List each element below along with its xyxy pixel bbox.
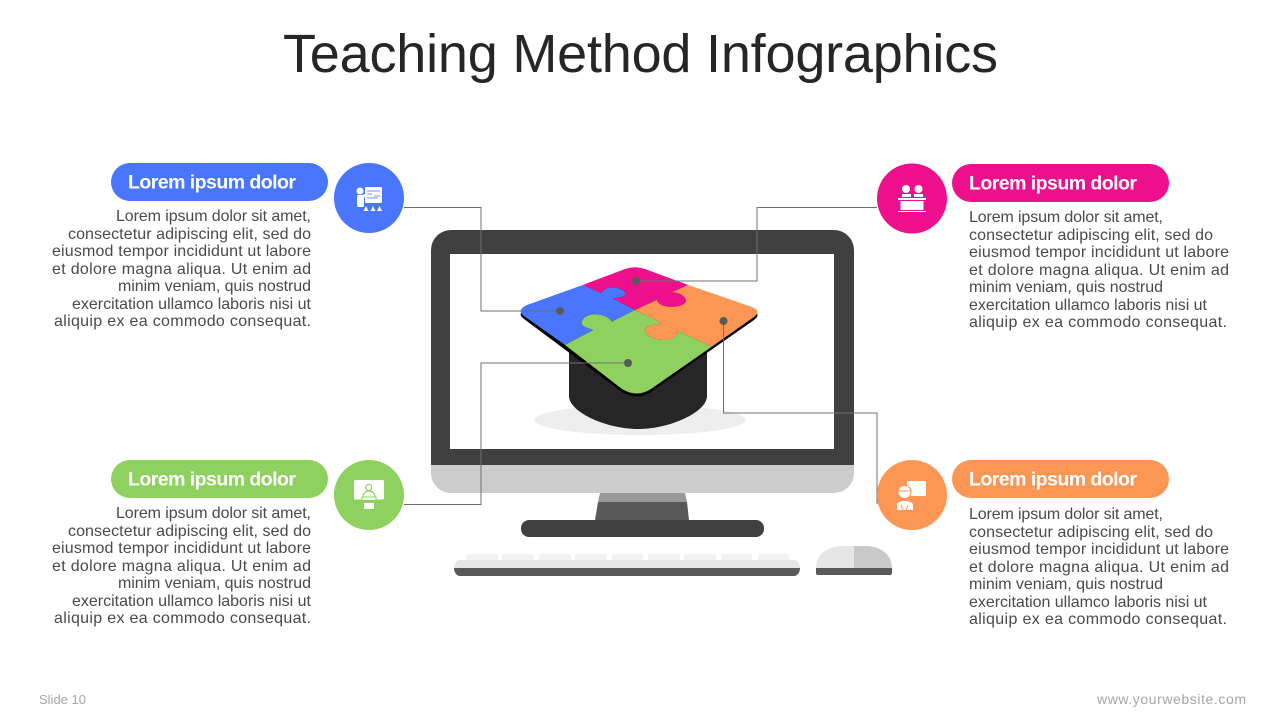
cap shadow: [534, 405, 746, 435]
body text: consectetur adipiscing elit, sed do: [969, 227, 1213, 244]
body text: exercitation ullamco laboris nisi ut: [72, 296, 312, 313]
body text: [52, 505, 312, 627]
body text: [52, 208, 312, 330]
puzzle piece: orange: [635, 285, 758, 347]
body text: Lorem ipsum dolor sit amet,: [116, 505, 311, 522]
body text: aliquip ex ea commodo consequat.: [54, 313, 311, 330]
heading pill: [111, 163, 328, 201]
body text: et dolore magna aliqua. Ut enim ad: [969, 559, 1229, 576]
keyboard: [454, 554, 800, 576]
icon: teacher with board: [877, 460, 947, 530]
panel: bottom right: [877, 460, 1229, 628]
panel: bottom left: [52, 460, 404, 627]
footer: slide number: Slide 10: [39, 692, 86, 707]
panel: top left: [52, 163, 404, 330]
monitor: [431, 230, 854, 493]
puzzle piece: blue: [521, 285, 635, 345]
body text: aliquip ex ea commodo consequat.: [54, 610, 311, 627]
body text: consectetur adipiscing elit, sed do: [68, 523, 311, 540]
body text: eiusmod tempor incididunt ut labore: [52, 243, 311, 260]
body text: [969, 506, 1229, 628]
body text: [969, 209, 1229, 331]
heading pill: Lorem ipsum dolor: [969, 172, 1137, 194]
panel: top right: [877, 164, 1229, 331]
connector: orange: [720, 317, 877, 504]
body text: aliquip ex ea commodo consequat.: [969, 314, 1227, 331]
body text: eiusmod tempor incididunt ut labore: [969, 541, 1229, 558]
body text: minim veniam, quis nostrud: [118, 278, 311, 295]
body text: Lorem ipsum dolor sit amet,: [969, 209, 1163, 226]
body text: exercitation ullamco laboris nisi ut: [72, 593, 312, 610]
connector: green: [404, 359, 632, 504]
heading pill: [111, 460, 328, 498]
heading pill: Lorem ipsum dolor: [969, 468, 1137, 490]
footer: website: www.yourwebsite.com: [1096, 691, 1246, 707]
graduation cap puzzle: [521, 267, 758, 435]
heading pill: Lorem ipsum dolor: [128, 468, 296, 490]
connector: blue: [404, 208, 564, 315]
body text: minim veniam, quis nostrud: [969, 576, 1163, 593]
body text: et dolore magna aliqua. Ut enim ad: [969, 262, 1229, 279]
icon: speaker at podium: [334, 460, 404, 530]
body text: consectetur adipiscing elit, sed do: [68, 226, 311, 243]
board edge: [521, 270, 758, 396]
body text: eiusmod tempor incididunt ut labore: [969, 244, 1229, 261]
title: Teaching Method Infographics: [283, 24, 998, 84]
body text: eiusmod tempor incididunt ut labore: [52, 540, 311, 557]
icon: presenter at board: [334, 163, 404, 233]
heading pill: Lorem ipsum dolor: [128, 172, 296, 194]
body text: minim veniam, quis nostrud: [969, 279, 1163, 296]
body text: et dolore magna aliqua. Ut enim ad: [52, 261, 311, 278]
mouse: [816, 546, 892, 575]
body text: minim veniam, quis nostrud: [118, 575, 311, 592]
cap body: [569, 340, 707, 429]
computer illustration: [431, 230, 892, 576]
connector: pink: [632, 208, 877, 285]
body text: exercitation ullamco laboris nisi ut: [969, 297, 1208, 314]
body text: Lorem ipsum dolor sit amet,: [116, 208, 311, 225]
monitor stand: [521, 493, 764, 537]
heading pill: [952, 460, 1169, 498]
icon: two people at desk: [877, 164, 947, 234]
body text: Lorem ipsum dolor sit amet,: [969, 506, 1163, 523]
puzzle piece: green: [565, 310, 712, 394]
body text: aliquip ex ea commodo consequat.: [969, 611, 1227, 628]
body text: exercitation ullamco laboris nisi ut: [969, 594, 1208, 611]
body text: et dolore magna aliqua. Ut enim ad: [52, 558, 311, 575]
body text: consectetur adipiscing elit, sed do: [969, 524, 1213, 541]
puzzle piece: pink: [583, 267, 688, 310]
heading pill: [952, 164, 1169, 202]
